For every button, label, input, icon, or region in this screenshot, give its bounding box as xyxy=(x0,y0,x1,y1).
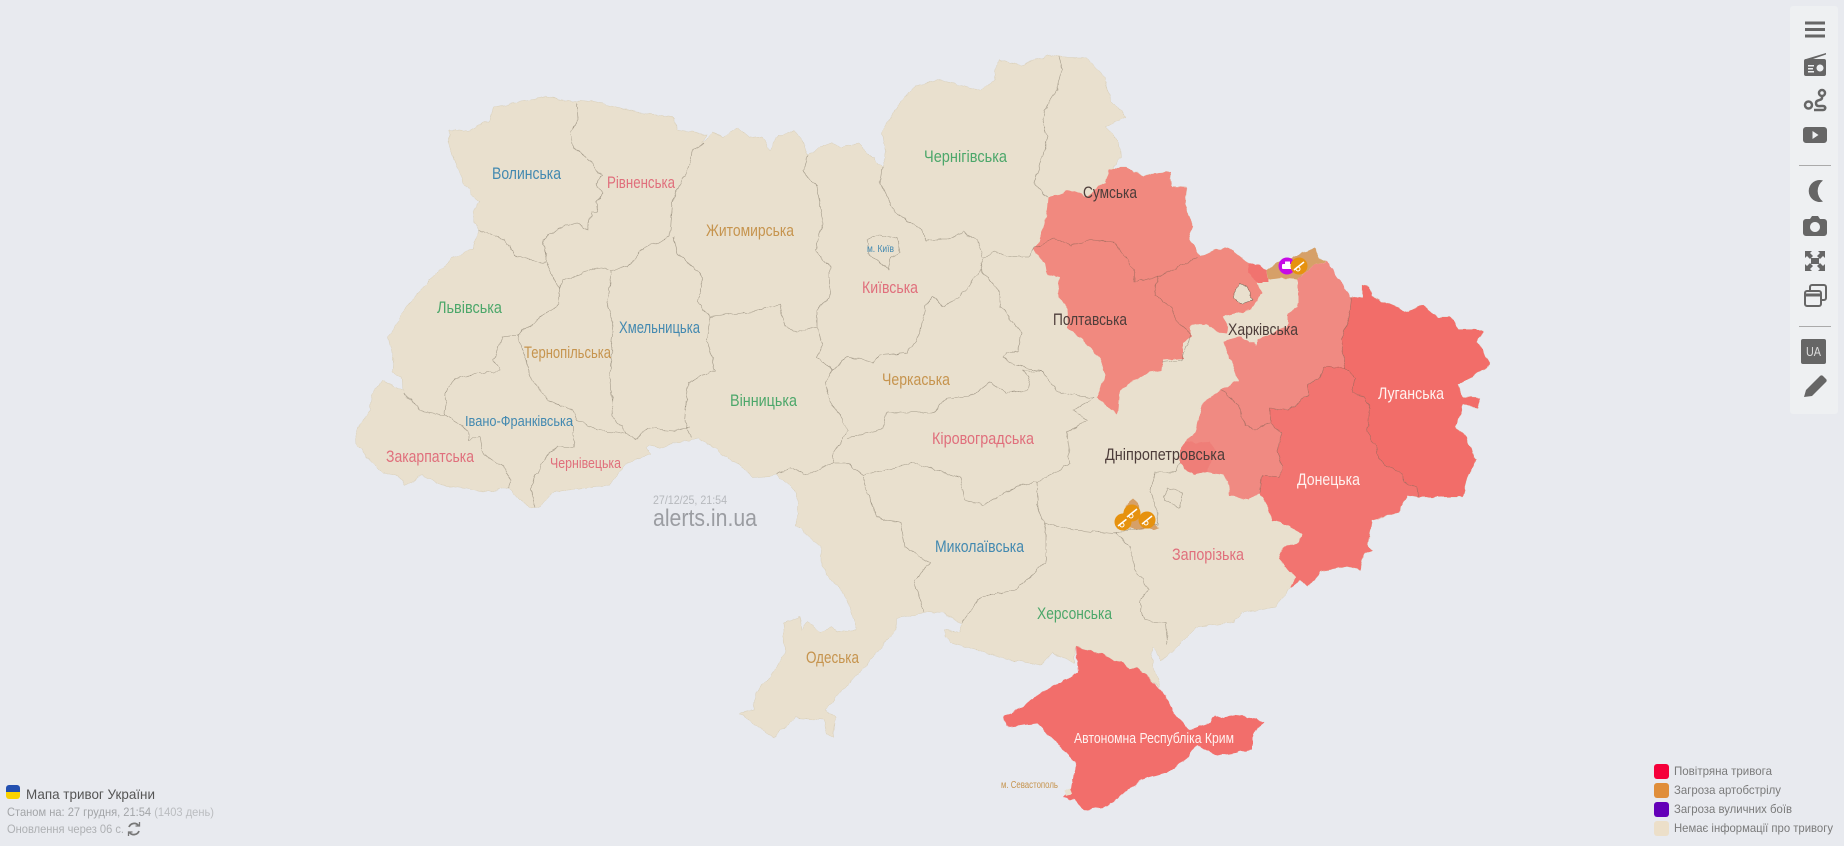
icon: moon xyxy=(1809,180,1823,202)
watermark: date stamp: 27/12/25, 21:54 xyxy=(653,493,727,507)
label: Odesa: Одеська xyxy=(806,648,859,667)
label: Donetsk: Донецька xyxy=(1297,470,1360,489)
label: Mykolaiv: Миколаївська xyxy=(935,537,1024,556)
threat marker: artillery, Zaporizhzhia 3 xyxy=(1138,512,1156,528)
Sevastopol marker xyxy=(1064,788,1072,796)
oblast labels xyxy=(386,147,1444,791)
label: Kyiv city: м. Київ xyxy=(867,244,894,255)
label: Dnipropetrovsk: Дніпропетровська xyxy=(1105,445,1225,464)
alert area: Dnipropetrovsk darker district xyxy=(1180,442,1215,475)
app title: Мапа тривог України xyxy=(26,786,155,802)
language button: UA xyxy=(1806,344,1821,359)
threat marker: street fighting, Kharkiv xyxy=(1278,258,1296,274)
alert area: east Kharkiv and east Dnipropetrovsk xyxy=(1180,262,1351,500)
alert region: Donetsk xyxy=(1260,367,1418,587)
icon: camera xyxy=(1803,216,1827,236)
threat marker: artillery, Zaporizhzhia 2 xyxy=(1124,504,1140,522)
label: Khmelnytskyi: Хмельницька xyxy=(619,318,700,337)
label: Kherson: Херсонська xyxy=(1037,604,1112,623)
label: Kirovohrad: Кіровоградська xyxy=(932,429,1034,448)
label: Vinnytsia: Вінницька xyxy=(730,391,797,410)
label: Sevastopol: м. Севастополь xyxy=(1001,780,1058,791)
footer info block xyxy=(6,785,214,836)
alert area: Kharkiv north district xyxy=(1248,262,1268,282)
label: Crimea: Автономна Республіка Крим xyxy=(1074,730,1234,747)
land: mainland territory xyxy=(356,55,1490,737)
icon: fullscreen xyxy=(1805,251,1825,271)
icon: windows xyxy=(1805,285,1826,306)
watermark: site name: alerts.in.ua xyxy=(653,505,758,532)
toolbar panel xyxy=(1790,6,1838,414)
icon: menu xyxy=(1805,22,1825,38)
alert region: Luhansk xyxy=(1341,285,1490,497)
label: Sumy: Сумська xyxy=(1083,183,1137,202)
alert area: Sumy, Poltava and west Kharkiv xyxy=(1033,168,1263,415)
label: Ternopil: Тернопільська xyxy=(524,343,611,362)
flag icon xyxy=(6,785,20,799)
icon: radio xyxy=(1804,53,1826,76)
label: Poltava: Полтавська xyxy=(1053,310,1127,329)
map of Ukraine xyxy=(356,55,1490,810)
language button xyxy=(1801,339,1826,364)
icon: pencil xyxy=(1804,375,1827,397)
alert area: Kharkiv city hole xyxy=(1233,285,1253,303)
legend item: no information: Немає інформації про тривогу xyxy=(1674,821,1833,835)
label: Volyn: Волинська xyxy=(492,164,561,183)
divider: lower xyxy=(1799,326,1831,327)
update countdown: Оновлення через 06 с. xyxy=(7,822,124,836)
label: Rivne: Рівненська xyxy=(607,173,675,192)
label: Zakarpattia: Закарпатська xyxy=(386,447,474,466)
legend xyxy=(1654,764,1833,836)
threat marker: artillery, Zaporizhzhia 1 xyxy=(1114,514,1132,530)
legend item: air alert: Повітряна тривога xyxy=(1674,764,1772,778)
status date: Станом на: 27 грудня, 21:54 (1403 день) xyxy=(7,805,214,819)
label: Kharkiv: Харківська xyxy=(1228,320,1298,339)
icon: route xyxy=(1805,90,1825,110)
label: Ivano-Frankivsk: Івано-Франківська xyxy=(465,413,574,430)
artillery threat area: Zaporizhzhia north xyxy=(1117,499,1160,529)
threat marker: artillery, Kharkiv xyxy=(1290,258,1308,274)
oblast borders xyxy=(403,57,1418,643)
label: Luhansk: Луганська xyxy=(1378,384,1444,403)
map regions xyxy=(356,55,1490,810)
label: Chernivtsi: Чернівецька xyxy=(550,455,622,472)
label: Cherkasy: Черкаська xyxy=(882,370,950,389)
label: Kyiv oblast: Київська xyxy=(862,278,918,297)
label: Zaporizhzhia: Запорізька xyxy=(1172,545,1244,564)
alert region: Crimea xyxy=(1004,647,1265,810)
icon: video xyxy=(1803,127,1827,143)
legend item: artillery threat: Загроза артобстрілу xyxy=(1674,783,1781,797)
artillery threat area: north Kharkiv xyxy=(1267,248,1327,280)
label: Zhytomyr: Житомирська xyxy=(706,221,794,240)
icon: refresh xyxy=(128,822,140,836)
label: Lviv: Львівська xyxy=(437,298,502,317)
label: Chernihiv: Чернігівська xyxy=(924,147,1007,166)
legend item: street fighting: Загроза вуличних боїв xyxy=(1674,802,1792,816)
divider: upper xyxy=(1799,165,1831,166)
